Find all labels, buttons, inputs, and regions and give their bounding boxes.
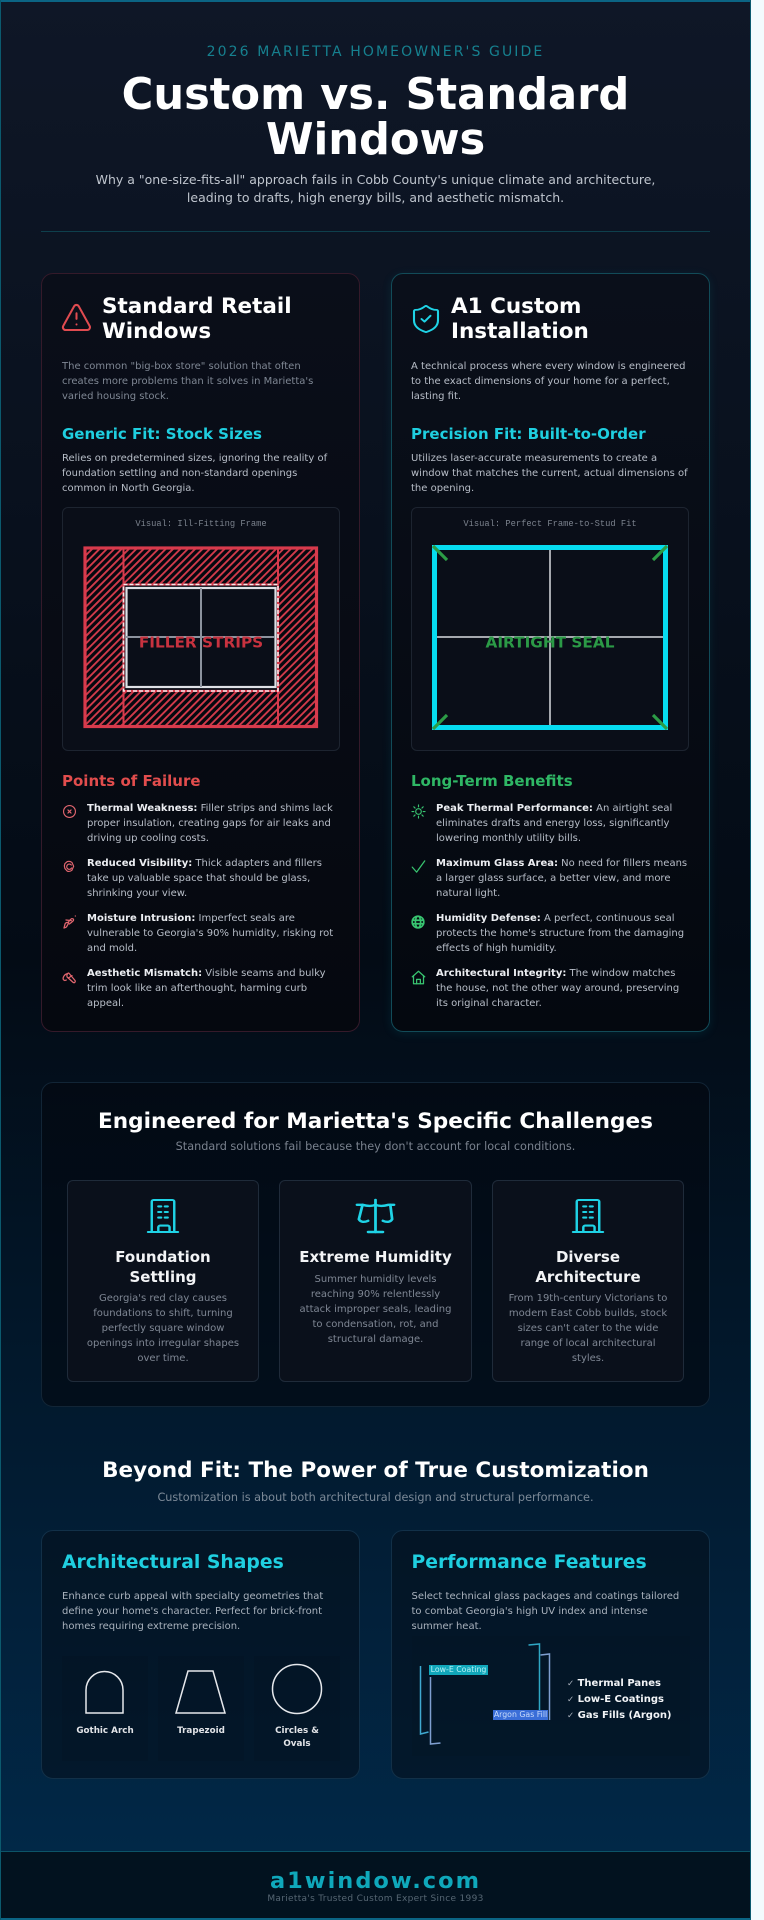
benefit item: peak thermal performance <box>436 802 672 844</box>
frame drawing with airtight seal: AIRTIGHT SEAL <box>486 634 615 652</box>
failure item: aesthetic mismatch: Aesthetic Mismatch: Visible seams and bulky <box>87 968 326 979</box>
description: custom <box>411 361 686 402</box>
panel text: Select technical glass packages and coatings tailored <box>412 1591 679 1602</box>
section heading: beyond fit: Beyond Fit: The Power of True Customization <box>102 1458 649 1483</box>
top edge line <box>0 0 751 2</box>
failure item: reduced visibility: take up valuable space that should be glass, <box>87 872 310 884</box>
subheading: generic fit: Generic Fit: Stock Sizes <box>62 424 262 442</box>
card text <box>300 1274 451 1345</box>
card text: reaching 90% relentlessly <box>311 1289 440 1300</box>
icon: building <box>146 1199 180 1233</box>
failure item: thermal weakness: proper insulation, creating gaps for air leaks and <box>87 818 331 828</box>
benefit item: maximum glass area: Maximum Glass Area: No need for fillers means <box>436 858 687 868</box>
paragraph: precision fit: Utilizes laser-accurate measurements to create a <box>411 453 657 464</box>
icon: home <box>412 970 426 984</box>
card heading: Architecture <box>535 1268 641 1286</box>
paragraph: generic fit: common in North Georgia. <box>62 483 195 494</box>
card text <box>509 1293 667 1364</box>
icon: x circle <box>63 805 76 818</box>
paragraph: generic fit: Relies on predetermined sizes, ignoring the reality of <box>62 453 327 464</box>
card heading: Diverse <box>556 1248 620 1266</box>
frame drawing with filler strips <box>83 546 318 728</box>
card text: openings into irregular shapes <box>87 1338 239 1349</box>
benefit item: architectural integrity: its original character. <box>436 998 542 1009</box>
panel text <box>62 1591 324 1632</box>
label: argon gas fill: Argon Gas Fill <box>494 1710 547 1718</box>
card text: attack improper seals, leading <box>300 1304 451 1315</box>
panel text: homes requiring extreme precision. <box>62 1621 240 1632</box>
heading: standard retail windows: Standard Retail <box>102 294 292 319</box>
card: diverse architecture <box>492 1180 684 1382</box>
feature checklist: ✓ Thermal Panes <box>567 1678 661 1689</box>
heading: a1 custom installation: Installation <box>451 319 589 344</box>
card: extreme humidity <box>279 1180 472 1382</box>
description: standard: The common "big-box store" solution that often <box>62 361 301 372</box>
card text: range of local architectural <box>520 1338 656 1349</box>
frame drawing with filler strips: FILLER STRIPS <box>139 634 263 652</box>
glass pane diagram <box>412 1636 690 1756</box>
panel: a1 custom installation <box>390 273 710 1032</box>
failure item: thermal weakness <box>87 802 333 844</box>
failure item: reduced visibility: shrinking your view. <box>87 888 187 898</box>
shape: trapezoid <box>158 1656 244 1761</box>
shape: gothic arch: Gothic Arch <box>76 1726 134 1736</box>
card: foundation settling <box>67 1180 259 1382</box>
icon: broken link <box>62 972 76 984</box>
subheading: long-term benefits: Long-Term Benefits <box>411 772 573 790</box>
card heading: Settling <box>129 1268 197 1286</box>
benefit item: peak thermal performance: eliminates drafts and energy loss, significantly <box>436 818 669 828</box>
heading: standard retail windows <box>102 294 292 344</box>
subheading: precision fit: Precision Fit: Built-to-Order <box>411 424 646 442</box>
header <box>41 44 710 232</box>
benefit item: peak thermal performance: Peak Thermal Performance: An airtight seal <box>436 802 672 814</box>
section heading: Engineered for Marietta's Specific Challenges <box>98 1109 653 1134</box>
tagline: 2026 MARIETTA HOMEOWNER'S GUIDE <box>207 44 544 60</box>
heading icon: shield check <box>412 305 440 333</box>
card text: styles. <box>572 1353 604 1364</box>
card text: perfectly square window <box>102 1323 224 1334</box>
diagram: ill-fitting frame <box>62 507 340 751</box>
paragraph: generic fit <box>62 453 328 494</box>
description: standard: creates more problems than it solves in Marietta's <box>62 376 313 387</box>
diagram caption: Visual: Ill-Fitting Frame <box>135 519 267 529</box>
card text: foundations to shift, turning <box>93 1308 233 1319</box>
paragraph: precision fit: window that matches the current, actual dimensions of <box>411 468 688 479</box>
failure item: moisture intrusion <box>87 912 333 954</box>
failure item: moisture intrusion: Moisture Intrusion: Imperfect seals are <box>87 912 295 924</box>
panel text <box>412 1589 679 1634</box>
title <box>122 70 629 165</box>
section subtitle: Standard solutions fail because they don't account for local conditions. <box>176 1140 575 1153</box>
failure item: thermal weakness: Thermal Weakness: Filler strips and shims lack <box>87 802 333 814</box>
failure item: reduced visibility: Reduced Visibility: Thick adapters and fillers <box>87 858 322 868</box>
benefit item: humidity defense: Humidity Defense: A perfect, continuous seal <box>436 912 674 924</box>
icon: building <box>572 1199 604 1233</box>
title: Windows <box>266 115 485 165</box>
panel: standard retail windows <box>41 273 360 1032</box>
card heading <box>535 1248 641 1286</box>
heading: a1 custom installation <box>451 294 589 344</box>
diagram: perfect fit <box>411 507 689 751</box>
card text: Summer humidity levels <box>315 1274 436 1285</box>
card text <box>87 1293 239 1364</box>
card text: modern East Cobb builds, stock <box>509 1308 667 1319</box>
panel text: to combat Georgia's high UV index and intense <box>412 1606 648 1617</box>
benefit item: humidity defense: effects of high humidity. <box>436 942 557 954</box>
benefit item: maximum glass area <box>436 858 687 898</box>
subtitle: leading to drafts, high energy bills, and aesthetic mismatch. <box>187 190 564 205</box>
footer brand: a1window.com <box>270 1868 481 1894</box>
pane lines <box>412 1636 690 1756</box>
icon: reduced view <box>64 860 74 872</box>
benefit item: humidity defense: protects the home's structure from the damaging <box>436 928 684 938</box>
section subtitle: customization: Customization is about both architectural design and structural performance. <box>157 1490 594 1504</box>
panel text: Enhance curb appeal with specialty geometries that <box>62 1591 323 1602</box>
panel: architectural shapes <box>41 1530 360 1779</box>
panel heading: Performance Features <box>412 1552 647 1573</box>
card heading <box>115 1248 211 1286</box>
diagram caption: Visual: Perfect Frame-to-Stud Fit <box>463 519 637 529</box>
card text: to condensation, rot, and <box>313 1319 438 1330</box>
icon: scales <box>356 1198 396 1234</box>
description: standard: varied housing stock. <box>62 391 169 402</box>
shape: circles and ovals: Ovals <box>283 1739 311 1749</box>
benefit item: architectural integrity: Architectural Integrity: The window matches <box>436 968 675 979</box>
panel heading: Architectural Shapes <box>62 1552 284 1573</box>
feature checklist: ✓ Gas Fills (Argon) <box>567 1710 672 1721</box>
feature checklist <box>567 1676 672 1724</box>
paragraph: precision fit: the opening. <box>411 483 474 494</box>
shape: gothic arch <box>62 1656 148 1761</box>
paragraph: precision fit <box>411 453 688 494</box>
title: Custom vs. Standard <box>122 70 629 120</box>
footer tagline: Marietta's Trusted Custom Expert Since 1993 <box>267 1894 484 1904</box>
failure item: aesthetic mismatch: appeal. <box>87 998 124 1009</box>
panel text: summer heat. <box>412 1621 482 1632</box>
shape: circles and ovals <box>254 1656 340 1761</box>
icon: check <box>412 860 426 873</box>
failure item: aesthetic mismatch <box>87 968 326 1009</box>
heading icon: warning triangle <box>62 304 91 331</box>
icon: globe <box>411 915 425 929</box>
icon: sun <box>411 804 426 819</box>
heading: a1 custom installation: A1 Custom <box>451 294 581 319</box>
panel text: define your home's character. Perfect for brick-front <box>62 1606 322 1617</box>
benefits list <box>411 802 687 1009</box>
benefit item: maximum glass area: a larger glass surface, a better view, and more <box>436 872 670 884</box>
heading: standard retail windows: Windows <box>102 319 211 344</box>
subtitle: Why a "one-size-fits-all" approach fails in Cobb County's unique climate and architecture, <box>96 172 655 187</box>
footer <box>0 1851 751 1920</box>
paragraph: generic fit: foundation settling and non-standard openings <box>62 468 297 479</box>
panel: marietta challenges <box>41 1082 710 1407</box>
label: low-e coating: Low-E Coating <box>431 1664 486 1674</box>
failure list <box>62 802 333 1009</box>
subtitle <box>96 172 655 205</box>
card heading: Extreme Humidity <box>299 1248 452 1266</box>
card text: structural damage. <box>328 1334 423 1345</box>
icon: moisture tool <box>63 915 76 929</box>
shape: trapezoid: Trapezoid <box>177 1726 225 1736</box>
failure item: moisture intrusion: vulnerable to Georgia's 90% humidity, risking rot <box>87 928 333 938</box>
frame drawing with airtight seal <box>432 544 668 730</box>
card text: sizes can't cater to the wide <box>518 1323 658 1334</box>
benefit item: architectural integrity: the house, not the other way around, preserving <box>436 983 679 994</box>
header divider <box>41 231 710 232</box>
description: standard <box>62 361 313 402</box>
card heading: Foundation <box>115 1248 211 1266</box>
card text: Georgia's red clay causes <box>99 1293 227 1304</box>
card text: over time. <box>137 1353 189 1364</box>
subheading: points of failure: Points of Failure <box>62 772 201 790</box>
failure item: moisture intrusion: and mold. <box>87 942 137 954</box>
failure item: aesthetic mismatch: trim look like an afterthought, harming curb <box>87 983 307 994</box>
shape: circles and ovals: Circles & <box>275 1726 319 1736</box>
description: custom: to the exact dimensions of your home for a perfect, <box>411 376 670 387</box>
failure item: thermal weakness: driving up cooling costs. <box>87 832 209 844</box>
panel: performance features <box>390 1530 710 1779</box>
description: custom: A technical process where every window is engineered <box>411 361 686 372</box>
failure item: reduced visibility <box>87 858 322 898</box>
benefit item: peak thermal performance: lowering monthly utility bills. <box>436 832 581 844</box>
benefit item: maximum glass area: natural light. <box>436 888 500 898</box>
benefit item: architectural integrity <box>436 968 679 1009</box>
description: custom: lasting fit. <box>411 391 461 402</box>
benefit item: humidity defense <box>436 912 684 954</box>
card text: From 19th-century Victorians to <box>509 1293 667 1304</box>
feature checklist: ✓ Low-E Coatings <box>567 1694 664 1705</box>
